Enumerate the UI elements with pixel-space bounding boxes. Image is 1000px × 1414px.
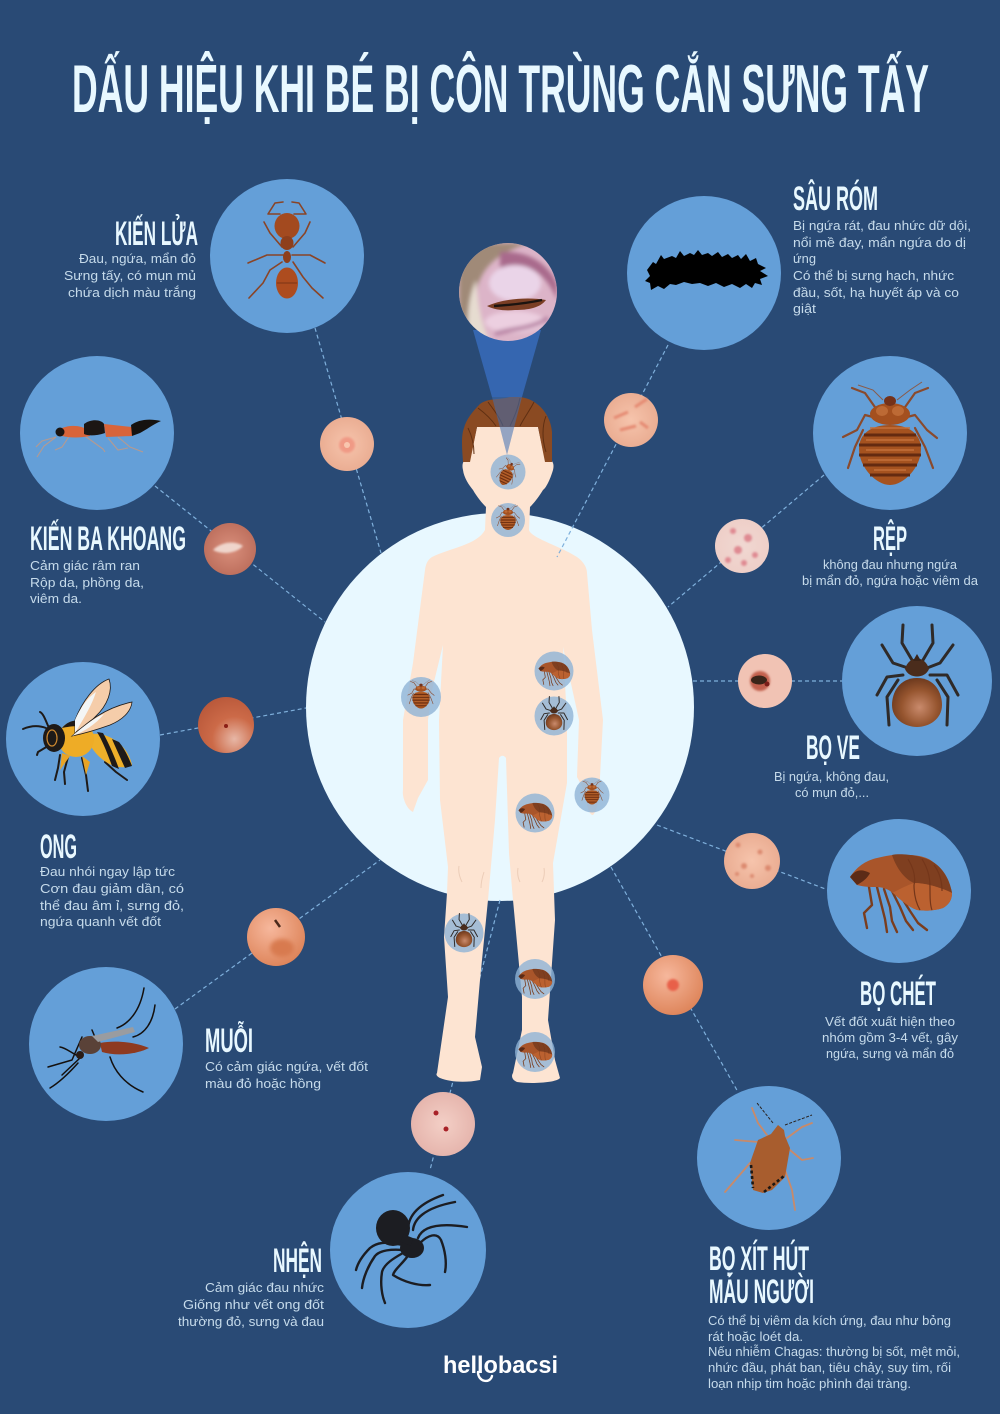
skin photos — [198, 393, 792, 1156]
description: thể đau âm ỉ, sưng đỏ, — [40, 898, 184, 913]
description: nổi mề đay, mẩn ngứa do dị — [793, 235, 966, 250]
bite: left shin — [444, 914, 484, 952]
panel: bo ve — [774, 606, 992, 800]
icon: fire ant — [248, 202, 325, 298]
icon: bedbug — [843, 382, 937, 485]
panel: kien lua — [64, 179, 364, 333]
skin: nhen — [411, 1092, 475, 1156]
description: Nếu nhiễm Chagas: thường bị sốt, mệt mỏi, — [708, 1344, 960, 1359]
description: Đau, ngứa, mẩn đỏ — [79, 251, 196, 266]
knee creases — [459, 866, 544, 888]
connector: sau rom to body — [557, 345, 668, 557]
description: viêm da. — [30, 591, 82, 606]
description: Vết đốt xuất hiện theo — [825, 1014, 955, 1029]
panel: kien ba khoang — [20, 356, 186, 606]
connector lines behind body — [155, 328, 843, 1170]
bite: thigh — [516, 794, 554, 832]
description — [178, 1280, 325, 1329]
description: ứng — [793, 251, 816, 266]
heading: KIẾN LỬA — [115, 215, 198, 253]
description: Có thể bị sưng hạch, nhức — [793, 268, 955, 283]
heading: MÁU NGƯỜI — [709, 1273, 814, 1311]
description: màu đỏ hoặc hồng — [205, 1076, 321, 1091]
icon: tick — [877, 625, 958, 727]
skin: rep — [715, 519, 769, 573]
panel: ong — [6, 662, 184, 929]
description — [708, 1313, 960, 1391]
description: nhức đầu, phát ban, tiêu chảy, suy tim, rối — [708, 1360, 951, 1375]
description: ngứa, sưng và mẩn đỏ — [826, 1046, 954, 1061]
skin: kien lua — [320, 417, 374, 471]
panel: sau rom — [627, 180, 971, 350]
skin: ong — [198, 697, 254, 753]
description: Cảm giác râm ran — [30, 558, 140, 573]
description — [774, 769, 889, 800]
bite: neck — [491, 503, 525, 537]
bite markers on body — [401, 454, 610, 1072]
description: Đau nhói ngay lập tức — [40, 864, 176, 879]
skin: muoi — [247, 908, 305, 966]
panel: ong: ONG — [40, 828, 77, 866]
bite: hand — [574, 778, 610, 812]
description: đầu, sốt, hạ huyết áp và co — [793, 285, 959, 300]
heading: SÂU RÓM — [793, 180, 878, 218]
callout beam over head — [492, 397, 522, 455]
bite: belly tick — [534, 696, 574, 736]
icon: mosquito — [48, 988, 155, 1092]
heading: BỌ XÍT HÚT — [709, 1240, 809, 1278]
description: Có thể bị viêm da kích ứng, đau như bỏng — [708, 1313, 951, 1328]
description: Rộp da, phồng da, — [30, 575, 144, 590]
panel: rep — [802, 356, 979, 588]
description — [822, 1014, 959, 1061]
icon: rove beetle — [36, 420, 161, 457]
description: nhóm gồm 3-4 vết, gây — [822, 1030, 959, 1045]
description: có mụn đỏ,... — [795, 785, 869, 800]
description: loạn nhịp tim hoặc phình đại tràng. — [708, 1376, 911, 1391]
icon: caterpillar — [645, 250, 768, 290]
bite: right shin — [515, 959, 555, 999]
bite: arm — [401, 677, 441, 717]
panel: muoi — [29, 967, 368, 1121]
heading: NHỆN — [273, 1242, 322, 1280]
bite: face — [490, 454, 526, 490]
skin: bo xit — [643, 955, 703, 1015]
description: thường đỏ, sưng và đau — [178, 1314, 324, 1329]
description: Có cảm giác ngứa, vết đốt — [205, 1059, 368, 1074]
skin: kien ba khoang — [204, 523, 256, 575]
description: rát hoặc loét da. — [708, 1329, 803, 1344]
center glow circle — [306, 513, 694, 901]
heading: MUỖI — [205, 1022, 253, 1060]
skin: bo chet — [724, 833, 780, 889]
heading: KIẾN BA KHOANG — [30, 520, 186, 558]
bite: ankle — [515, 1032, 555, 1072]
heading — [709, 1240, 814, 1311]
logo: hellobacsi — [443, 1352, 558, 1379]
description: giật — [793, 301, 816, 316]
icon: flea — [850, 854, 952, 932]
description: Cơn đau giảm dần, có — [40, 881, 184, 896]
panel: nhen — [178, 1172, 486, 1329]
icon: spider — [356, 1195, 467, 1303]
bite: belly flea — [534, 652, 574, 690]
description — [64, 251, 196, 300]
description: Giống như vết ong đốt — [183, 1297, 324, 1312]
panel: bo xit hut mau nguoi — [697, 1086, 960, 1391]
description: chứa dịch màu trắng — [68, 285, 196, 300]
description — [205, 1059, 368, 1091]
icon: assassin bug — [725, 1103, 813, 1210]
description: Bị ngứa rát, đau nhức dữ dội, — [793, 218, 971, 233]
description: không đau nhưng ngứa — [823, 557, 958, 572]
heading: BỌ VE — [806, 729, 860, 767]
description — [40, 864, 184, 929]
description — [30, 558, 144, 606]
description: Cảm giác đau nhức — [205, 1280, 325, 1295]
skin: bo ve — [738, 654, 792, 708]
hair strands — [468, 398, 546, 454]
description — [802, 557, 979, 588]
hair — [462, 397, 552, 462]
icon: bee — [23, 679, 132, 791]
skin: sau rom — [604, 393, 658, 447]
description: ngứa quanh vết đốt — [40, 914, 161, 929]
illustration: child body — [403, 397, 603, 1083]
description: bị mẩn đỏ, ngứa hoặc viêm da — [802, 573, 979, 588]
panel: bo chet — [822, 819, 971, 1061]
description: Sưng tấy, có mụn mủ — [64, 268, 196, 283]
eye close-up photo — [459, 243, 557, 341]
panel: rep: RỆP — [873, 520, 907, 558]
description — [793, 218, 971, 316]
description: Bị ngứa, không đau, — [774, 769, 889, 784]
callout beam from eye — [473, 330, 541, 397]
